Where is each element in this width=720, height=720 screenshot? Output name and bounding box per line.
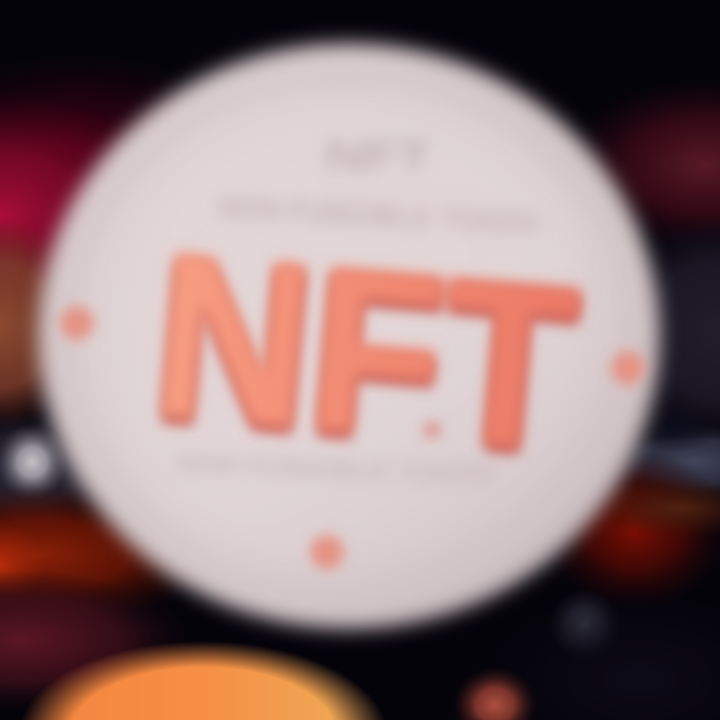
coin dots [60, 306, 645, 569]
orange coin at bottom [22, 642, 384, 720]
NFT heading shadow: NFT [145, 212, 586, 507]
dot: bottom [310, 535, 344, 569]
NFT heading: NFT [144, 204, 585, 499]
coin inner ring [71, 78, 627, 594]
dot: right [611, 351, 645, 385]
caption: non fungible token: NON FUNGIBLE TOKEN [217, 189, 539, 241]
dot: left [60, 306, 94, 340]
dot: small centre [423, 421, 441, 439]
coin disc [38, 43, 660, 629]
main coin [38, 43, 660, 629]
lower caption: non fungible token: NON FUNGIBLE TOKEN [175, 448, 495, 490]
top caption: NFT: NFT [326, 132, 431, 179]
